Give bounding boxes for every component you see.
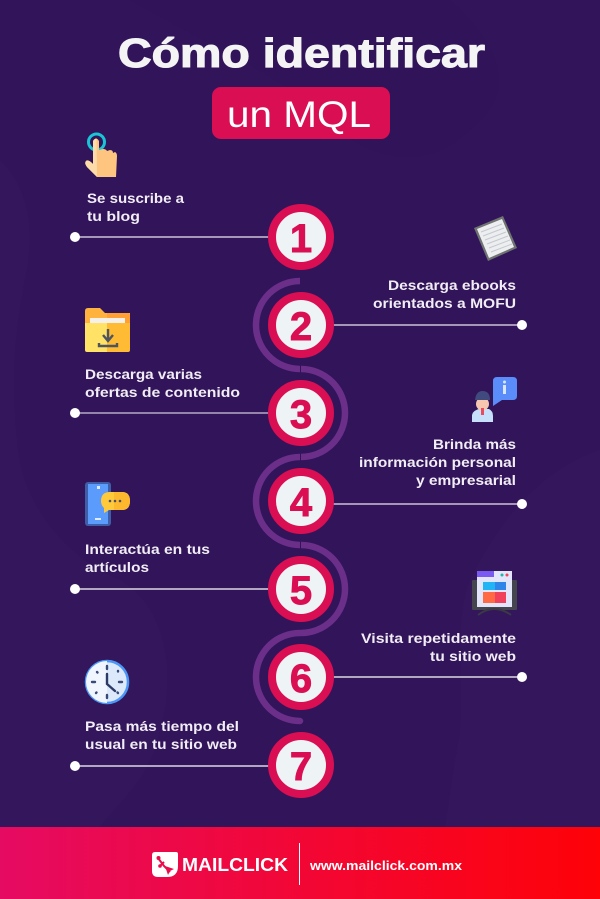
icon: pointing hand bbox=[85, 134, 117, 177]
label: step 5: artículos bbox=[85, 559, 149, 575]
label: step 4: y empresarial bbox=[416, 472, 516, 488]
label: step 7: Pasa más tiempo del bbox=[85, 718, 239, 734]
label: step 4: Brinda más bbox=[433, 436, 516, 452]
label: step 7: usual en tu sitio web bbox=[85, 736, 237, 752]
step 2: 2 bbox=[290, 305, 312, 349]
step 7: 7 bbox=[290, 745, 312, 789]
icon: clock bbox=[86, 661, 128, 703]
step 7 bbox=[70, 736, 330, 794]
step 3: 3 bbox=[290, 393, 312, 437]
label: step 4: información personal bbox=[359, 454, 516, 470]
label: step 6: tu sitio web bbox=[430, 648, 516, 664]
icon: phone with chat bubble bbox=[85, 482, 130, 526]
label: step 2 bbox=[373, 277, 516, 311]
logo wordmark: MAILCLICK bbox=[182, 854, 289, 875]
label: step 2: orientados a MOFU bbox=[373, 295, 516, 311]
title: Cómo identificar bbox=[118, 30, 485, 76]
label: step 5: Interactúa en tus bbox=[85, 541, 210, 557]
label: step 6: Visita repetidamente bbox=[361, 630, 516, 646]
logo mark bbox=[152, 852, 178, 877]
icon: browser on monitor bbox=[472, 571, 517, 615]
website url: www.mailclick.com.mx bbox=[309, 858, 463, 873]
label: step 2: Descarga ebooks bbox=[388, 277, 516, 293]
label: step 1: Se suscribe a bbox=[87, 190, 184, 206]
label: step 4 bbox=[359, 436, 516, 488]
connector arcs bbox=[256, 281, 345, 721]
step 6 bbox=[272, 648, 527, 706]
step 1 bbox=[70, 208, 330, 266]
subtitle pill: un MQL bbox=[227, 94, 371, 135]
label: step 3: ofertas de contenido bbox=[85, 384, 240, 400]
label: step 6 bbox=[361, 630, 516, 664]
label: step 3 bbox=[85, 366, 240, 400]
step 2 bbox=[272, 296, 527, 354]
step 5: 5 bbox=[290, 569, 312, 613]
label: step 1 bbox=[87, 190, 184, 224]
step 4: 4 bbox=[290, 481, 313, 525]
label: step 7 bbox=[85, 718, 239, 752]
icon: person with info bubble bbox=[472, 377, 517, 422]
label: step 3: Descarga varias bbox=[85, 366, 202, 382]
subtitle pill bbox=[212, 87, 390, 139]
footer bbox=[0, 827, 600, 899]
step 5 bbox=[70, 560, 330, 618]
label: step 5 bbox=[85, 541, 210, 575]
step 3 bbox=[70, 384, 330, 442]
step 4 bbox=[272, 472, 527, 530]
icon: download folder bbox=[85, 308, 130, 352]
icon: document bbox=[474, 216, 517, 261]
step 6: 6 bbox=[290, 657, 312, 701]
label: step 1: tu blog bbox=[87, 208, 140, 224]
step 1: 1 bbox=[290, 217, 312, 261]
